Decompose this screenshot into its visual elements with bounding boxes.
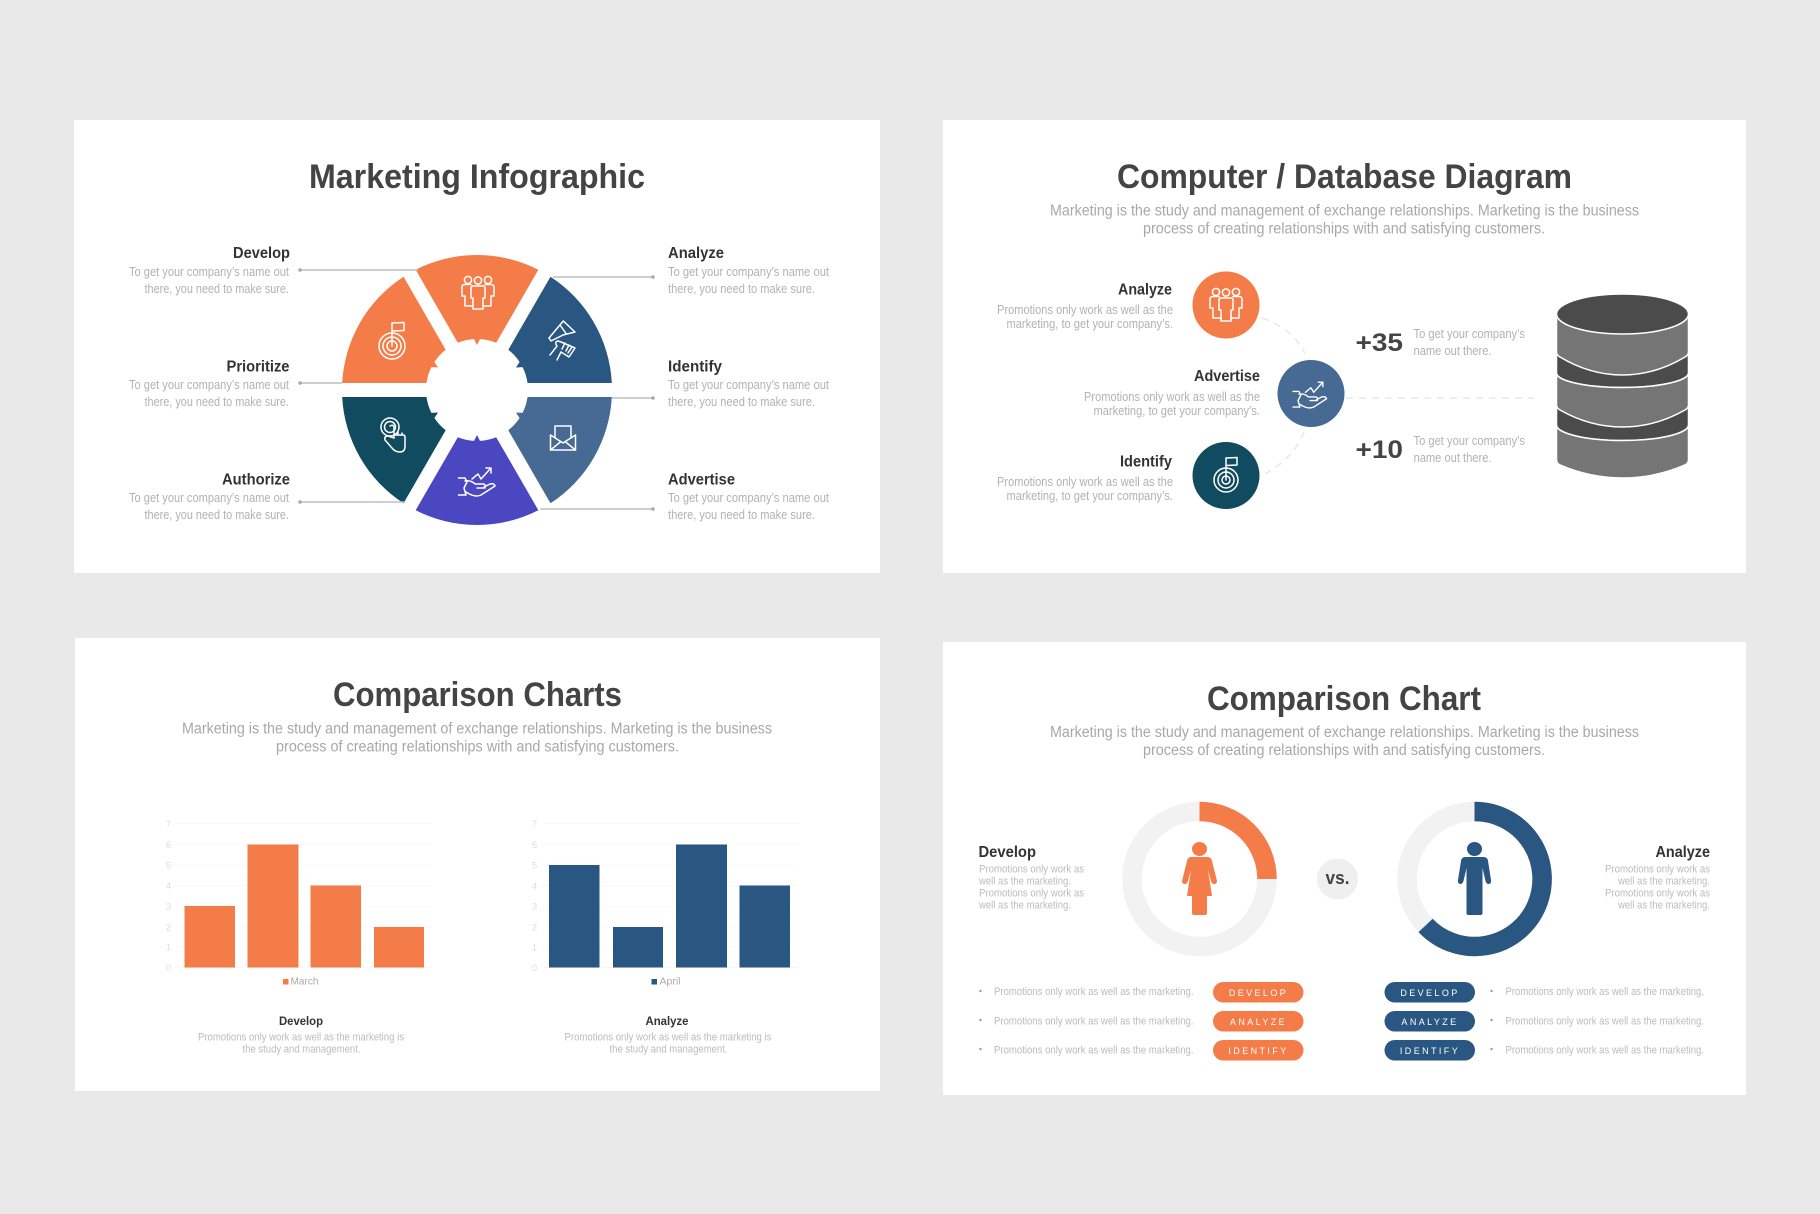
segment: identify megaphone <box>485 269 625 421</box>
bar chart: march <box>166 819 431 988</box>
bar chart: march: 3 <box>166 902 171 912</box>
title: Comparison Charts <box>333 676 622 714</box>
text block: analyze: well as the marketing. <box>1617 900 1710 912</box>
subtitle: process of creating relationships with and satisfying customers. <box>1143 220 1545 238</box>
stat: +10: To get your company’s <box>1414 434 1525 448</box>
subtitle: process of creating relationships with and satisfying customers. <box>1143 742 1545 759</box>
list: right bullets: Promotions only work as well as the marketing. <box>1506 1044 1704 1056</box>
text block: analyze <box>1605 844 1710 912</box>
caption: analyze: Analyze <box>646 1014 689 1028</box>
list: right bullets: Promotions only work as well as the marketing. <box>1506 986 1704 998</box>
stat: +35 <box>1356 327 1525 358</box>
segment: develop target <box>329 269 469 421</box>
node: analyze: Analyze <box>1118 282 1172 298</box>
caption: develop: Promotions only work as well as the marketing is <box>198 1032 404 1044</box>
callout: authorize: To get your company’s name out <box>129 491 289 505</box>
text block: develop: well as the marketing. <box>978 876 1071 888</box>
bar chart: march: 6 <box>166 840 171 851</box>
callout: develop: Develop <box>233 245 290 262</box>
stat: +35: +35 <box>1356 329 1403 357</box>
node: identify: Identify <box>1120 454 1172 470</box>
title: Marketing Infographic <box>309 158 645 196</box>
icon: database cylinder <box>1556 294 1688 478</box>
node: advertise <box>1084 360 1344 427</box>
pills: right blue <box>1384 982 1475 1060</box>
donut chart: analyze <box>1407 811 1542 946</box>
text block: develop: Promotions only work as <box>979 888 1084 900</box>
callout: prioritize <box>129 358 342 409</box>
subtitle: Marketing is the study and management of exchange relationships. Marketing is the business <box>182 720 772 738</box>
badge: vs <box>1317 858 1358 900</box>
segment: advertise envelope <box>485 359 625 511</box>
node: analyze <box>997 272 1260 338</box>
callout: prioritize: Prioritize <box>226 358 290 376</box>
icon: people <box>462 276 494 309</box>
stat: +35: name out there. <box>1414 344 1492 358</box>
node: advertise: marketing, to get your company’s. <box>1094 404 1260 418</box>
list: left bullets <box>979 986 1194 1056</box>
pills: left orange: DEVELOP <box>1229 988 1288 998</box>
text block: develop <box>978 844 1084 912</box>
pills: left orange: IDENTIFY <box>1228 1046 1289 1056</box>
icon: envelope <box>550 426 576 450</box>
badge: vs: vs. <box>1326 868 1350 888</box>
text block: develop: well as the marketing. <box>978 900 1071 912</box>
list: left bullets: Promotions only work as well as the marketing. <box>994 986 1194 998</box>
icon: hand with megaphone <box>549 321 575 360</box>
title: Comparison Chart <box>1207 680 1481 718</box>
callout: analyze: To get your company’s name out <box>668 265 829 279</box>
callout: develop: there, you need to make sure. <box>144 282 289 296</box>
callout: advertise: Advertise <box>668 472 735 488</box>
caption: develop <box>198 1014 404 1056</box>
bar chart: april: 1 <box>532 942 537 954</box>
caption: analyze <box>564 1014 772 1056</box>
callout: identify: there, you need to make sure. <box>668 395 815 409</box>
bar chart: april <box>532 819 798 988</box>
callout: develop <box>129 245 418 296</box>
text block: develop: Develop <box>978 844 1036 861</box>
subtitle <box>1050 724 1639 759</box>
callout: authorize: Authorize <box>222 472 290 488</box>
callout: develop: To get your company’s name out <box>129 265 289 279</box>
callout: advertise <box>540 472 829 522</box>
segment: authorize touch <box>329 359 469 511</box>
subtitle: process of creating relationships with and satisfying customers. <box>276 738 679 756</box>
bar chart: march: 2 <box>166 922 171 934</box>
bar chart: march: 4 <box>166 881 171 892</box>
caption: analyze: Promotions only work as well as the marketing is <box>564 1032 772 1044</box>
panel: comparison charts <box>75 638 880 1091</box>
node: identify: Promotions only work as well as the <box>997 475 1173 489</box>
node: identify <box>997 442 1260 509</box>
caption: develop: Develop <box>279 1014 323 1028</box>
subtitle: Marketing is the study and management of exchange relationships. Marketing is the business <box>1050 202 1639 220</box>
stat: +35: To get your company’s <box>1414 327 1525 341</box>
bar chart: april: 7 <box>532 819 537 830</box>
callout: authorize: there, you need to make sure. <box>144 508 289 522</box>
pills: right blue: IDENTIFY <box>1400 1046 1460 1056</box>
callout: prioritize: To get your company’s name out <box>129 378 289 392</box>
bar chart: march: 0 <box>166 963 171 974</box>
text block: analyze: Analyze <box>1656 844 1710 861</box>
node: advertise: Promotions only work as well as the <box>1084 390 1260 404</box>
icon: people <box>1210 288 1242 321</box>
segment: hand chart <box>416 435 538 525</box>
node: advertise: Advertise <box>1194 368 1260 385</box>
subtitle <box>1050 202 1639 238</box>
list: left bullets: Promotions only work as well as the marketing. <box>994 1044 1194 1056</box>
callout: advertise: To get your company’s name out <box>668 491 829 505</box>
pills: right blue: ANALYZE <box>1401 1017 1459 1027</box>
stat: +10 <box>1356 434 1525 465</box>
bar chart: april: 4 <box>532 881 537 892</box>
list: right bullets <box>1490 986 1704 1056</box>
bar chart: april: 0 <box>532 963 537 974</box>
node: identify: marketing, to get your company’s. <box>1006 489 1173 503</box>
caption: analyze: the study and management. <box>610 1044 728 1056</box>
list: left bullets: Promotions only work as well as the marketing. <box>994 1016 1194 1028</box>
callout: identify: Identify <box>668 358 722 376</box>
node: analyze: Promotions only work as well as the <box>997 303 1173 317</box>
icon: male figure <box>1458 842 1491 915</box>
bar chart: march: 5 <box>166 860 171 872</box>
text block: develop: Promotions only work as <box>979 864 1084 876</box>
caption: develop: the study and management. <box>242 1044 360 1056</box>
panel: computer database diagram <box>943 120 1746 573</box>
pills: left orange: ANALYZE <box>1230 1017 1287 1027</box>
bar chart: april: 5 <box>532 860 537 872</box>
list: right bullets: Promotions only work as well as the marketing. <box>1506 1016 1704 1028</box>
legend: march: March <box>290 976 318 988</box>
node: analyze: marketing, to get your company’s. <box>1006 317 1173 331</box>
pills: right blue: DEVELOP <box>1400 988 1460 998</box>
pills: left orange <box>1213 982 1304 1060</box>
callout: identify: To get your company’s name out <box>668 378 829 392</box>
text block: analyze: Promotions only work as <box>1605 864 1710 876</box>
callout: prioritize: there, you need to make sure. <box>144 395 289 409</box>
card background <box>75 638 880 1091</box>
bar chart: april: 3 <box>532 902 537 912</box>
legend: april <box>652 976 680 988</box>
callout: analyze <box>553 245 829 296</box>
bar chart: march: 1 <box>166 942 171 954</box>
bar chart: march: 7 <box>166 819 171 830</box>
segment: analyze group <box>416 255 538 345</box>
legend: april: April <box>660 976 680 988</box>
segment wheel <box>329 255 625 525</box>
stat: +10: +10 <box>1356 436 1403 464</box>
subtitle <box>182 720 772 756</box>
icon: hand with growth arrow <box>458 468 495 496</box>
text block: analyze: Promotions only work as <box>1605 888 1710 900</box>
icon: hand with growth arrow <box>1293 382 1327 408</box>
callout: analyze: there, you need to make sure. <box>668 282 815 296</box>
donut chart: develop <box>1132 812 1267 946</box>
subtitle: Marketing is the study and management of exchange relationships. Marketing is the business <box>1050 724 1639 741</box>
callout: analyze: Analyze <box>668 245 724 262</box>
stat: +10: name out there. <box>1414 451 1492 465</box>
bar chart: april: 6 <box>532 840 537 851</box>
card background <box>943 642 1746 1095</box>
callout: identify <box>612 358 829 409</box>
card background <box>74 120 880 573</box>
callout: advertise: there, you need to make sure. <box>668 508 815 522</box>
title: Computer / Database Diagram <box>1117 158 1572 196</box>
icon: target flag <box>1214 458 1238 492</box>
text block: analyze: well as the marketing. <box>1617 876 1710 888</box>
panel: comparison chart <box>943 642 1746 1095</box>
icon: female figure <box>1182 842 1217 915</box>
icon: target flag <box>379 322 405 359</box>
bar chart: april: 2 <box>532 922 537 934</box>
dashed connectors <box>1262 318 1534 474</box>
panel: marketing infographic <box>74 120 880 573</box>
card background <box>943 120 1746 573</box>
icon: touch finger <box>381 418 405 452</box>
callout: authorize <box>129 472 405 522</box>
